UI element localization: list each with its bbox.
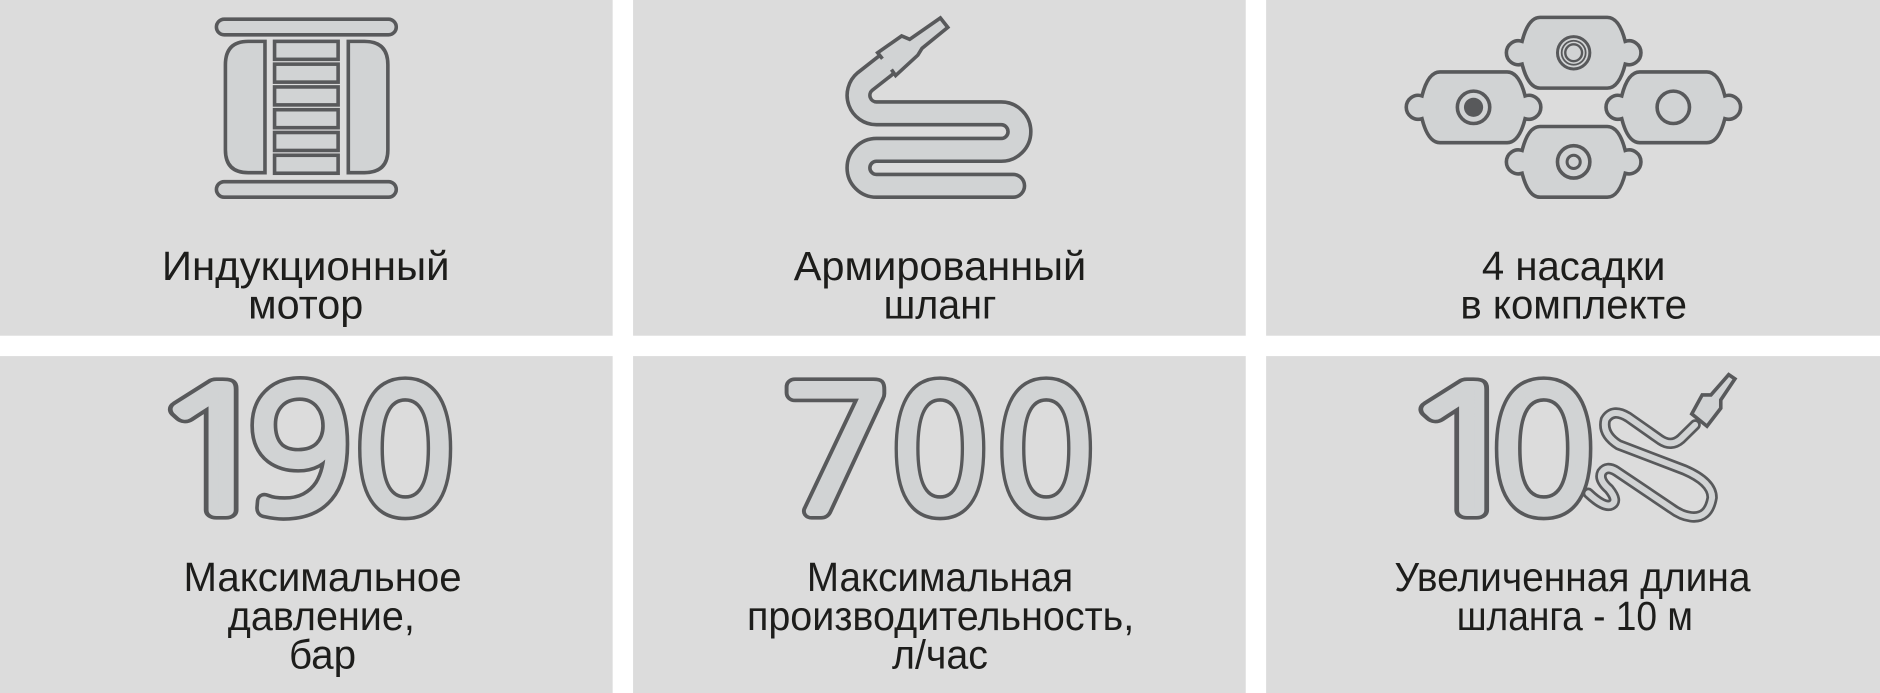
label: induction motor: мотор (248, 281, 363, 327)
number: 700: 0 (997, 365, 1094, 537)
number: 190: 9 (247, 365, 352, 537)
panel: induction motor (0, 0, 613, 336)
icon: motor (216, 19, 396, 197)
label: max throughput: производительность, (747, 593, 1134, 639)
panel: longer hose (1266, 356, 1880, 693)
label: max pressure: Максимальное (183, 554, 462, 600)
number: 700: 0 (997, 365, 1094, 537)
number: 190: 9 (247, 365, 352, 537)
panel: four nozzles (1266, 0, 1880, 336)
icon: nozzles (1406, 17, 1741, 197)
label: max throughput (747, 554, 1134, 677)
number: 700: 7 (779, 365, 893, 537)
label: reinforced hose: шланг (884, 281, 996, 327)
number: 700: 0 (892, 365, 987, 537)
number: 700: 0 (892, 365, 987, 537)
number: 190: 1 (145, 365, 283, 537)
label: four nozzles: 4 насадки (1482, 243, 1665, 289)
number: 190: 0 (355, 365, 454, 537)
label: longer hose: шланга - 10 м (1457, 593, 1693, 639)
panel: max pressure (0, 356, 613, 693)
label: induction motor (162, 243, 450, 327)
number: 700: 7 (779, 365, 893, 537)
number: 190 (145, 365, 454, 537)
number: 10 (1396, 365, 1595, 537)
panel: reinforced hose (633, 0, 1246, 336)
label: four nozzles (1460, 243, 1687, 327)
label: reinforced hose (794, 243, 1086, 327)
icon: hose (858, 18, 1019, 186)
label: max pressure: бар (289, 631, 356, 677)
icon: coiled hose with connector (1588, 375, 1735, 517)
label: longer hose: Увеличенная длина (1394, 554, 1751, 600)
number: 700 (779, 365, 1094, 537)
number: 10: 1 (1396, 365, 1533, 537)
panel: max throughput (633, 356, 1246, 693)
label: max throughput: л/час (892, 631, 988, 677)
number: 190: 1 (145, 365, 283, 537)
label: four nozzles: в комплекте (1460, 281, 1687, 327)
label: max pressure (183, 554, 462, 677)
label: max pressure: давление, (228, 593, 415, 639)
number: 190: 0 (355, 365, 454, 537)
number: 10: 1 (1396, 365, 1533, 537)
label: induction motor: Индукционный (162, 243, 450, 289)
number: 10: 0 (1492, 365, 1595, 537)
label: reinforced hose: Армированный (794, 243, 1086, 289)
label: max throughput: Максимальная (807, 554, 1073, 600)
number: 10: 0 (1492, 365, 1595, 537)
label: longer hose (1394, 554, 1751, 639)
